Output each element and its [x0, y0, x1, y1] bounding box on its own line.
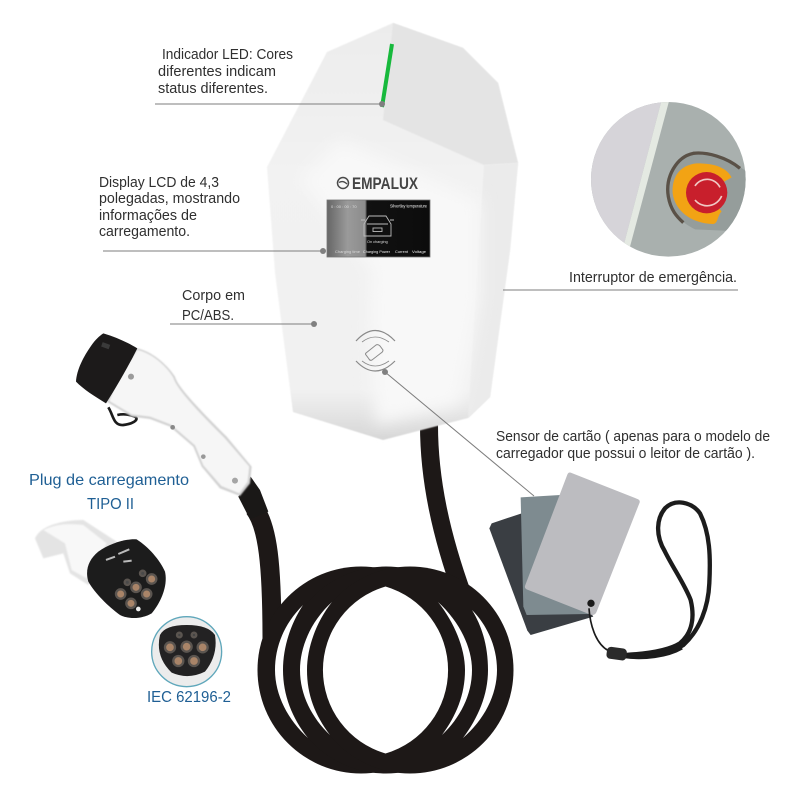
lanyard clip [606, 646, 627, 661]
car icon [361, 216, 394, 236]
inset light panel [591, 102, 661, 242]
callout: card sensor: Sensor de cartão ( apenas para o modelo de [496, 428, 770, 445]
callout: body material: PC/ABS. [182, 307, 234, 324]
plug handle [109, 350, 249, 493]
white connector body [35, 520, 117, 585]
icon: RFID card sensor [356, 330, 395, 371]
yellow collar [673, 163, 732, 224]
callout: LCD display: polegadas, mostrando [99, 190, 240, 207]
LCD display: Voltage [412, 249, 427, 254]
LCD display: Current [395, 249, 409, 254]
body shell [267, 23, 518, 440]
cable coil [254, 425, 514, 774]
callout: LED indicator: status diferentes. [158, 80, 268, 97]
coil inner opening [323, 586, 448, 754]
callout: LCD display: informações de [99, 207, 197, 224]
card hole [587, 600, 595, 607]
LED indicator [382, 44, 392, 107]
logo: EMPALUX [352, 175, 418, 193]
callout: LCD display [99, 174, 326, 254]
light card [525, 473, 640, 615]
top right facet [383, 23, 518, 165]
callout: body material [170, 287, 317, 327]
center highlight [300, 140, 480, 425]
connector shell [87, 539, 166, 618]
LCD display [327, 200, 430, 257]
label: IEC standard: IEC 62196-2 [147, 689, 231, 706]
right side facet [468, 163, 518, 418]
LCD display: Charging time [335, 249, 361, 254]
plug handle edge [107, 348, 252, 496]
charger body [267, 23, 518, 440]
heading: plug type [29, 472, 189, 513]
callout: LCD display: Display LCD de 4,3 [99, 174, 219, 191]
callout: LCD display: carregamento. [99, 223, 190, 240]
emergency stop inset [591, 102, 746, 257]
callout: body material: Corpo em [182, 287, 245, 304]
red button [686, 172, 727, 213]
charging plug [76, 333, 268, 519]
heading: plug type: TIPO II [87, 496, 134, 513]
connector photo [35, 520, 166, 618]
coil gaps [275, 602, 497, 738]
IEC socket icon [152, 617, 222, 687]
plug head [76, 333, 137, 403]
callout: LED indicator [155, 46, 385, 107]
callout: card sensor: carregador que possui o leitor de cartão ). [496, 445, 755, 462]
callout: LED indicator: diferentes indicam [158, 63, 276, 80]
RFID cards with lanyard [489, 473, 640, 651]
plug lanyard loop [108, 407, 137, 425]
cable boot [238, 477, 268, 519]
connector pins [116, 571, 156, 608]
callout: card sensor [382, 369, 770, 496]
lanyard strap [606, 502, 710, 661]
dark card [489, 513, 593, 635]
LCD display: Silvertlay temperature [390, 204, 428, 208]
medium card [521, 494, 588, 615]
LCD display: 0 : 00 : 00 : 70 [331, 204, 357, 209]
button recess [668, 153, 747, 232]
LCD display: Charging Power [363, 249, 391, 254]
callout: LED indicator: Indicador LED: Cores [162, 46, 293, 63]
lanyard cord [589, 608, 608, 651]
heading: plug type: Plug de carregamento [29, 472, 189, 489]
callout: emergency switch: Interruptor de emergência. [569, 269, 737, 286]
LCD display: On charging [367, 240, 388, 244]
